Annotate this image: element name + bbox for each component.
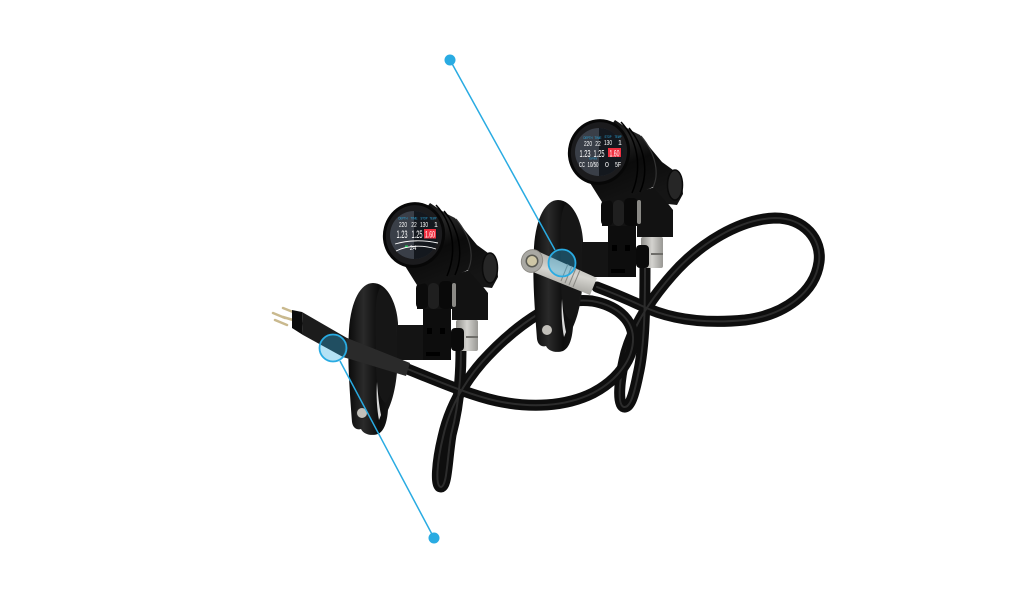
round screen: 1.25: [594, 149, 605, 160]
round screen: 220: [584, 141, 592, 148]
molded sleeve: [302, 312, 380, 366]
round screen: [561, 112, 637, 192]
round screen: 1.60: [610, 148, 620, 158]
left display unit: [348, 195, 498, 435]
callout: pin cable detail: [320, 334, 440, 544]
tail cable with pin connector: [273, 308, 410, 376]
round screen: 1.60: [425, 230, 435, 240]
cable: left unit loop rising: [405, 300, 633, 487]
round screen: STOP: [604, 135, 612, 139]
round screen: 1: [434, 222, 438, 229]
metal connector: [641, 237, 663, 268]
round screen: DEPTH: [584, 136, 593, 140]
round screen: TEMP: [430, 216, 437, 220]
housing: [580, 120, 683, 205]
contact pins: [273, 308, 293, 325]
round screen: 22: [595, 141, 601, 148]
round screen: 1: [618, 140, 622, 147]
callout: connector detail: [444, 54, 576, 276]
round screen: 10/50: [588, 162, 599, 169]
metal connector: [456, 320, 478, 351]
round screen: 130: [604, 140, 612, 147]
right clamp ring: [533, 200, 583, 352]
round screen: 1.25: [412, 229, 422, 241]
clamp bolt: [356, 408, 368, 418]
round screen: TIME: [410, 216, 418, 220]
round screen: 22: [411, 222, 417, 229]
round screen: 130: [420, 222, 428, 229]
cable: right unit loop: [597, 218, 819, 407]
round screen: 220: [399, 222, 407, 229]
round screen: TEMP: [614, 135, 622, 139]
right display unit: [533, 112, 683, 352]
bracket and mount block: [582, 187, 673, 277]
corrugated section: [343, 338, 410, 376]
round screen: [376, 195, 452, 275]
bracket and mount block: [397, 270, 488, 360]
round screen: 5F: [615, 162, 621, 169]
housing: [395, 203, 498, 288]
round screen: CC: [579, 162, 585, 169]
round screen: 1.23: [580, 149, 591, 160]
small knob: [636, 245, 649, 268]
small knob: [451, 328, 464, 351]
round screen: DEPTH: [398, 216, 408, 220]
round screen: 24: [410, 246, 417, 252]
round screen: GF99: [589, 156, 597, 160]
right cable connector: [518, 246, 597, 295]
left clamp ring: [348, 283, 398, 435]
clamp bolt: [542, 324, 552, 336]
round screen: TIME: [594, 136, 602, 140]
round screen: 1.23: [396, 229, 408, 241]
round screen: 0: [605, 162, 609, 169]
round screen: STOP: [420, 216, 428, 220]
